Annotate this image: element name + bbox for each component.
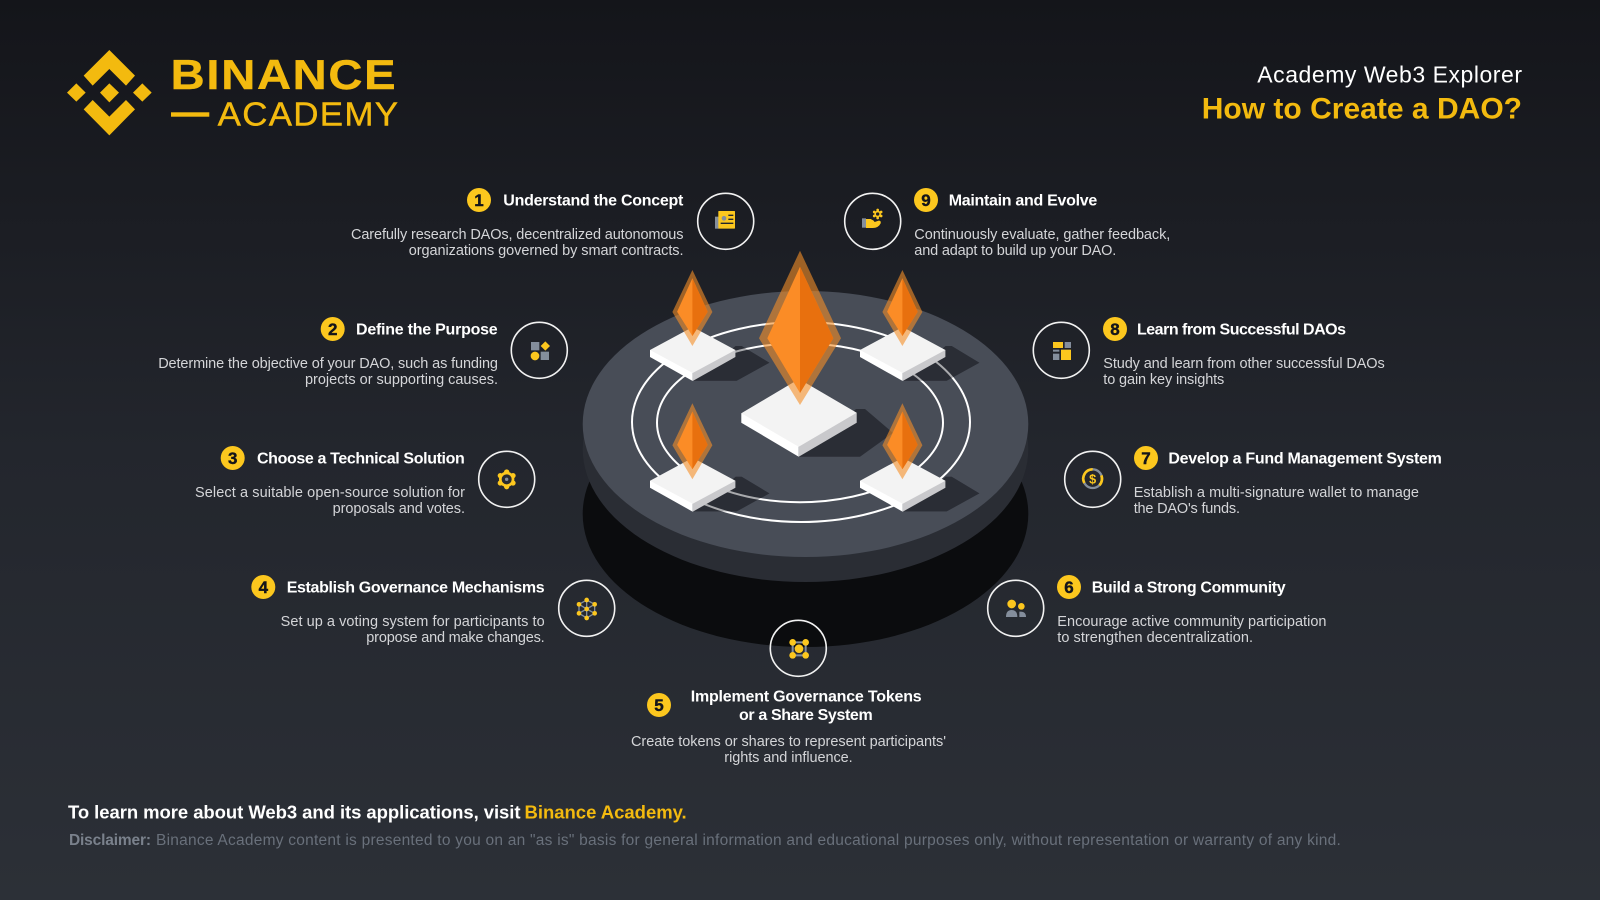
- badge 3: 3: [228, 449, 237, 468]
- token: top left: [672, 270, 712, 346]
- icon: gear: [479, 451, 535, 507]
- description 2: projects or supporting causes.: [305, 372, 498, 388]
- heading 6: Build a Strong Community: [1092, 580, 1286, 596]
- heading 3: Choose a Technical Solution: [257, 450, 465, 468]
- badge 4: [251, 575, 275, 599]
- header: series and title: How to Create a DAO?: [1202, 92, 1522, 125]
- badge 1: 1: [474, 191, 484, 210]
- platform base: [583, 291, 1028, 647]
- logo wordmark: [171, 51, 399, 133]
- badge 8: 8: [1110, 320, 1120, 339]
- description 4: Set up a voting system for participants to: [281, 614, 545, 630]
- icon: dashboard blocks: [1033, 322, 1089, 378]
- icon: token nodes: [770, 620, 826, 676]
- badge 3: [221, 446, 245, 470]
- token: bottom left: [672, 403, 712, 479]
- step 2: Define the Purpose: [158, 317, 567, 388]
- badge 6: [1057, 575, 1081, 599]
- badge 6: 6: [1064, 578, 1074, 597]
- footer: disclaimer: Binance Academy content is presented to you on an "as is" basis for general information and educational purposes only, without representation or warranty of any kind.: [156, 832, 1341, 849]
- description 3: [195, 485, 465, 517]
- heading 2: Define the Purpose: [356, 322, 498, 338]
- badge 5: 5: [654, 696, 664, 715]
- badge 2: 2: [328, 320, 337, 339]
- tile: centre: [741, 379, 857, 457]
- icon: network cube: [559, 580, 615, 636]
- badge 2: [321, 317, 345, 341]
- heading 5: [691, 689, 922, 724]
- icon: hand with gear: [845, 193, 901, 249]
- description 2: [158, 356, 498, 388]
- token: bottom right: [882, 403, 922, 479]
- icon: dollar cycle: $: [1089, 472, 1096, 486]
- icon: shapes: [511, 322, 567, 378]
- footer: disclaimer: Disclaimer:: [69, 832, 151, 849]
- token: centre large: [759, 251, 841, 405]
- description 6: [1057, 614, 1326, 646]
- description 1: organizations governed by smart contracts.: [409, 243, 684, 259]
- description 7: [1134, 485, 1419, 517]
- step 7: Develop a Fund Management System: [1065, 446, 1442, 517]
- description 1: [351, 227, 684, 259]
- description 4: [281, 614, 545, 646]
- step 9: Maintain and Evolve: [845, 188, 1170, 259]
- footer: call to action: To learn more about Web3 and its applications, visit: [68, 802, 520, 823]
- description 8: to gain key insights: [1103, 372, 1224, 388]
- description 7: Establish a multi-signature wallet to manage: [1134, 485, 1419, 501]
- heading 5: Implement Governance Tokens: [691, 689, 922, 706]
- illustration: layered platform with tokens: [583, 251, 1028, 647]
- header: series and title: [1202, 62, 1522, 125]
- step 3: Choose a Technical Solution: [195, 446, 535, 517]
- icon: people: [988, 580, 1044, 636]
- tile: bottom left: [650, 458, 735, 512]
- icon: dollar cycle: [1065, 451, 1121, 507]
- heading 7: Develop a Fund Management System: [1168, 450, 1442, 468]
- token: top right: [882, 270, 922, 346]
- heading 4: Establish Governance Mechanisms: [287, 580, 545, 596]
- heading 1: Understand the Concept: [503, 192, 684, 210]
- description 5: rights and influence.: [724, 750, 853, 766]
- description 8: [1103, 356, 1385, 388]
- tile: bottom right: [860, 458, 945, 512]
- description 5: Create tokens or shares to represent participants': [631, 734, 946, 750]
- badge 5: [647, 693, 671, 717]
- step 1: Understand the Concept: [351, 188, 754, 259]
- footer: call to action: Binance Academy.: [524, 802, 687, 823]
- description 9: Continuously evaluate, gather feedback,: [914, 227, 1170, 243]
- icon: Binance diamond mark: [67, 50, 152, 135]
- heading 5: or a Share System: [739, 707, 873, 724]
- heading 8: Learn from Successful DAOs: [1137, 322, 1346, 338]
- description 7: the DAO's funds.: [1134, 501, 1240, 517]
- tile shadows: [693, 346, 979, 511]
- description 1: Carefully research DAOs, decentralized autonomous: [351, 227, 684, 243]
- step 6: Build a Strong Community: [988, 575, 1326, 646]
- logo wordmark: ACADEMY: [218, 96, 399, 133]
- badge 8: [1103, 317, 1127, 341]
- step 8: Learn from Successful DAOs: [1033, 317, 1385, 388]
- badge 1: [467, 188, 491, 212]
- logo wordmark: BINANCE: [171, 51, 397, 98]
- description 8: Study and learn from other successful DAOs: [1103, 356, 1385, 372]
- badge 9: [914, 188, 938, 212]
- badge 9: 9: [921, 191, 931, 210]
- badge 4: 4: [259, 578, 269, 597]
- description 6: Encourage active community participation: [1057, 614, 1326, 630]
- description 3: Select a suitable open-source solution for: [195, 485, 465, 501]
- description 4: propose and make changes.: [366, 630, 545, 646]
- badge 7: 7: [1141, 449, 1151, 468]
- step 5: Implement Governance Tokens or a Share System: [631, 620, 946, 766]
- step 4: Establish Governance Mechanisms: [251, 575, 615, 646]
- icon: newspaper: [698, 193, 754, 249]
- badge 7: [1134, 446, 1158, 470]
- description 6: to strengthen decentralization.: [1057, 630, 1253, 646]
- logo: Binance Academy: [67, 50, 399, 135]
- concentric rings: [632, 322, 970, 522]
- description 2: Determine the objective of your DAO, such as funding: [158, 356, 498, 372]
- description 3: proposals and votes.: [333, 501, 465, 517]
- description 9: [914, 227, 1170, 259]
- header: series and title: Academy Web3 Explorer: [1257, 62, 1522, 88]
- tile: top right: [860, 327, 945, 381]
- heading 9: Maintain and Evolve: [949, 192, 1097, 210]
- description 5: [631, 734, 946, 766]
- description 9: and adapt to build up your DAO.: [914, 243, 1116, 259]
- tile: top left: [650, 327, 735, 381]
